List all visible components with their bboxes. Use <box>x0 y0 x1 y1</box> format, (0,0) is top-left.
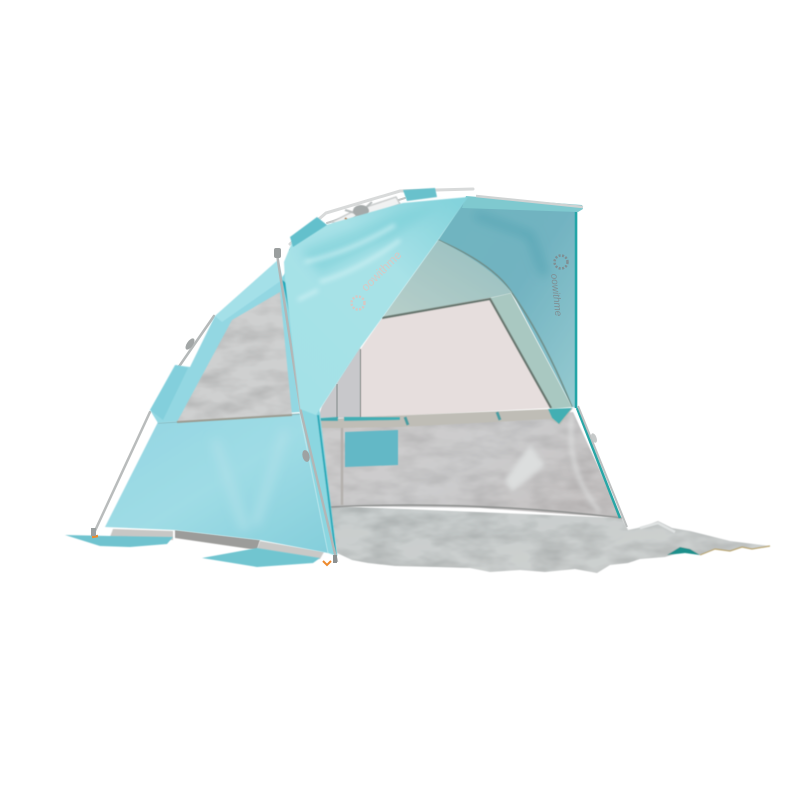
ground flap left <box>65 535 173 547</box>
top tab right <box>403 188 437 201</box>
side wall lower panel <box>105 414 328 553</box>
ground sheet <box>330 506 770 573</box>
frame poles <box>94 189 473 533</box>
logo: roof panel <box>548 256 568 317</box>
side wall upper panel <box>150 260 300 423</box>
silver back wall <box>320 412 622 518</box>
back roof hem strip <box>462 196 583 212</box>
horizontal rail with teal clips <box>316 408 573 428</box>
rear pole <box>476 196 583 207</box>
left inner wall upper <box>318 346 360 418</box>
logo: front flap <box>352 248 405 310</box>
mid back panel <box>382 240 512 318</box>
interior pocket <box>345 430 398 467</box>
top tab left <box>290 217 327 247</box>
side mesh window <box>177 292 292 422</box>
orange foot left <box>91 528 98 537</box>
orange foot right <box>323 555 337 565</box>
right edge trim <box>575 212 577 408</box>
roof hub <box>332 197 400 226</box>
back roof panel <box>438 198 577 408</box>
logo: front flap: oowithme <box>358 248 405 294</box>
main front flap <box>284 197 468 415</box>
side lower silver strip <box>175 530 260 550</box>
pole strip teal <box>280 272 337 556</box>
ground flap right <box>202 548 320 567</box>
dark seam <box>336 384 338 418</box>
side back panel <box>490 293 572 409</box>
logo: roof panel: oowithme <box>548 273 563 317</box>
right pole and teal trim <box>577 406 627 527</box>
back window <box>360 299 551 418</box>
ground flap right silver <box>257 541 324 559</box>
front pole <box>184 248 337 562</box>
ground flap left silver <box>110 529 173 540</box>
